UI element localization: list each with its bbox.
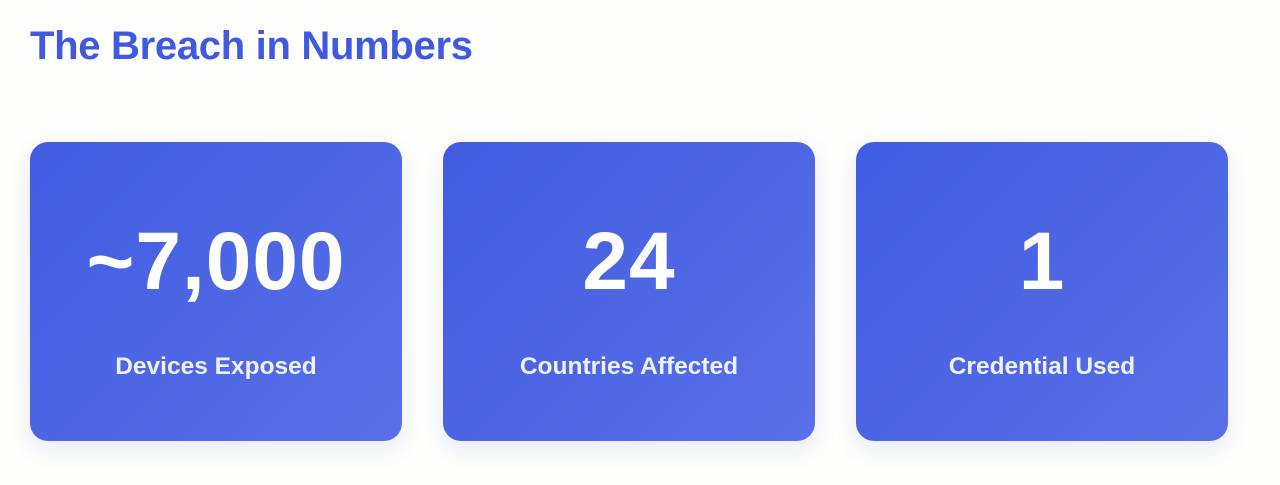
number: countries: 24 <box>582 216 676 307</box>
number: devices: ~7,000 <box>86 216 346 307</box>
label: credential: Credential Used <box>949 353 1135 380</box>
label: countries: Countries Affected <box>520 353 738 380</box>
title: The Breach in Numbers <box>30 24 473 68</box>
panel: devices exposed <box>30 142 402 441</box>
panel: countries affected <box>443 142 815 441</box>
label: devices: Devices Exposed <box>115 353 317 380</box>
number: credential: 1 <box>1019 216 1065 307</box>
panel: credential used <box>856 142 1228 441</box>
